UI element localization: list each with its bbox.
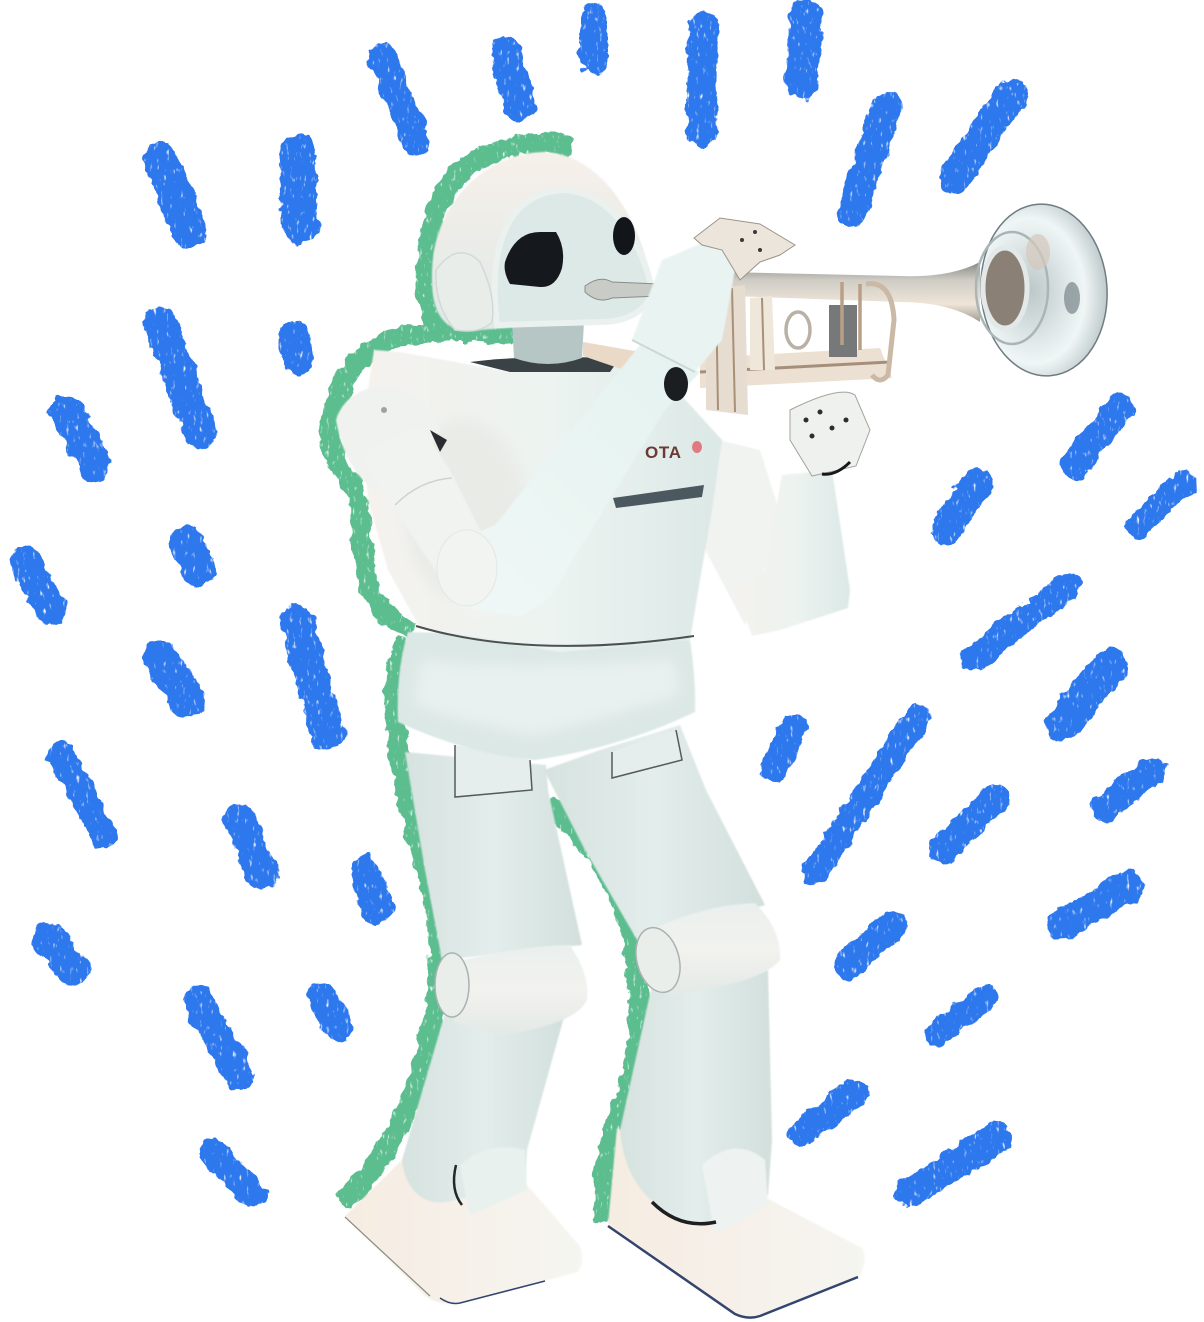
finger ring: [786, 312, 810, 348]
left knee disc: [435, 953, 469, 1017]
forearm: [438, 345, 700, 617]
right knee disc: [629, 923, 687, 997]
right foot: [608, 1128, 865, 1318]
bell throat: [983, 248, 1027, 328]
far forearm: [735, 470, 850, 636]
waist line: [416, 626, 694, 646]
slide window: [829, 305, 857, 357]
valve casing: [706, 285, 748, 415]
ear: [436, 253, 493, 331]
wrist hole: [664, 367, 688, 401]
top tube: [722, 262, 980, 322]
left lower leg: [402, 1010, 566, 1203]
right eye: [613, 217, 635, 255]
far upper arm: [700, 440, 782, 625]
head: [432, 152, 652, 331]
neck: [512, 322, 584, 364]
green crayon outline: [330, 144, 639, 1222]
left shoulder: [336, 385, 440, 490]
left ankle: [460, 1147, 527, 1215]
face panel: [495, 190, 652, 325]
left upper arm: [360, 425, 520, 620]
right thigh: [544, 725, 765, 945]
trumpet: [585, 200, 1113, 415]
lower hand: [790, 392, 870, 476]
shoulder bar: [583, 342, 640, 372]
neck collar: [470, 357, 620, 372]
left thigh notch: [455, 745, 532, 797]
logo text: [645, 441, 702, 462]
torso: [362, 350, 722, 652]
pelvis: [398, 632, 695, 760]
left foot: [345, 1160, 582, 1304]
chest shading: [405, 420, 525, 600]
right ankle: [702, 1149, 768, 1235]
raised hand: [632, 218, 795, 372]
left shoulder gap: [430, 430, 447, 452]
left knee: [440, 945, 587, 1035]
mouthpiece: [585, 279, 660, 300]
bottom tube: [700, 348, 892, 388]
visor eye: [505, 232, 563, 287]
right knee: [640, 903, 780, 995]
chest vent: [613, 485, 704, 508]
bell: [975, 200, 1113, 380]
elbow disc: [437, 530, 497, 606]
valve slide: [866, 284, 894, 380]
right lower leg: [620, 970, 772, 1225]
left thigh: [405, 752, 582, 960]
right thigh notch: [612, 730, 682, 778]
valve stems: [842, 282, 860, 350]
shoulder pin: [381, 407, 387, 413]
logo text: OTA: [645, 443, 681, 462]
robot: [336, 152, 1113, 1318]
